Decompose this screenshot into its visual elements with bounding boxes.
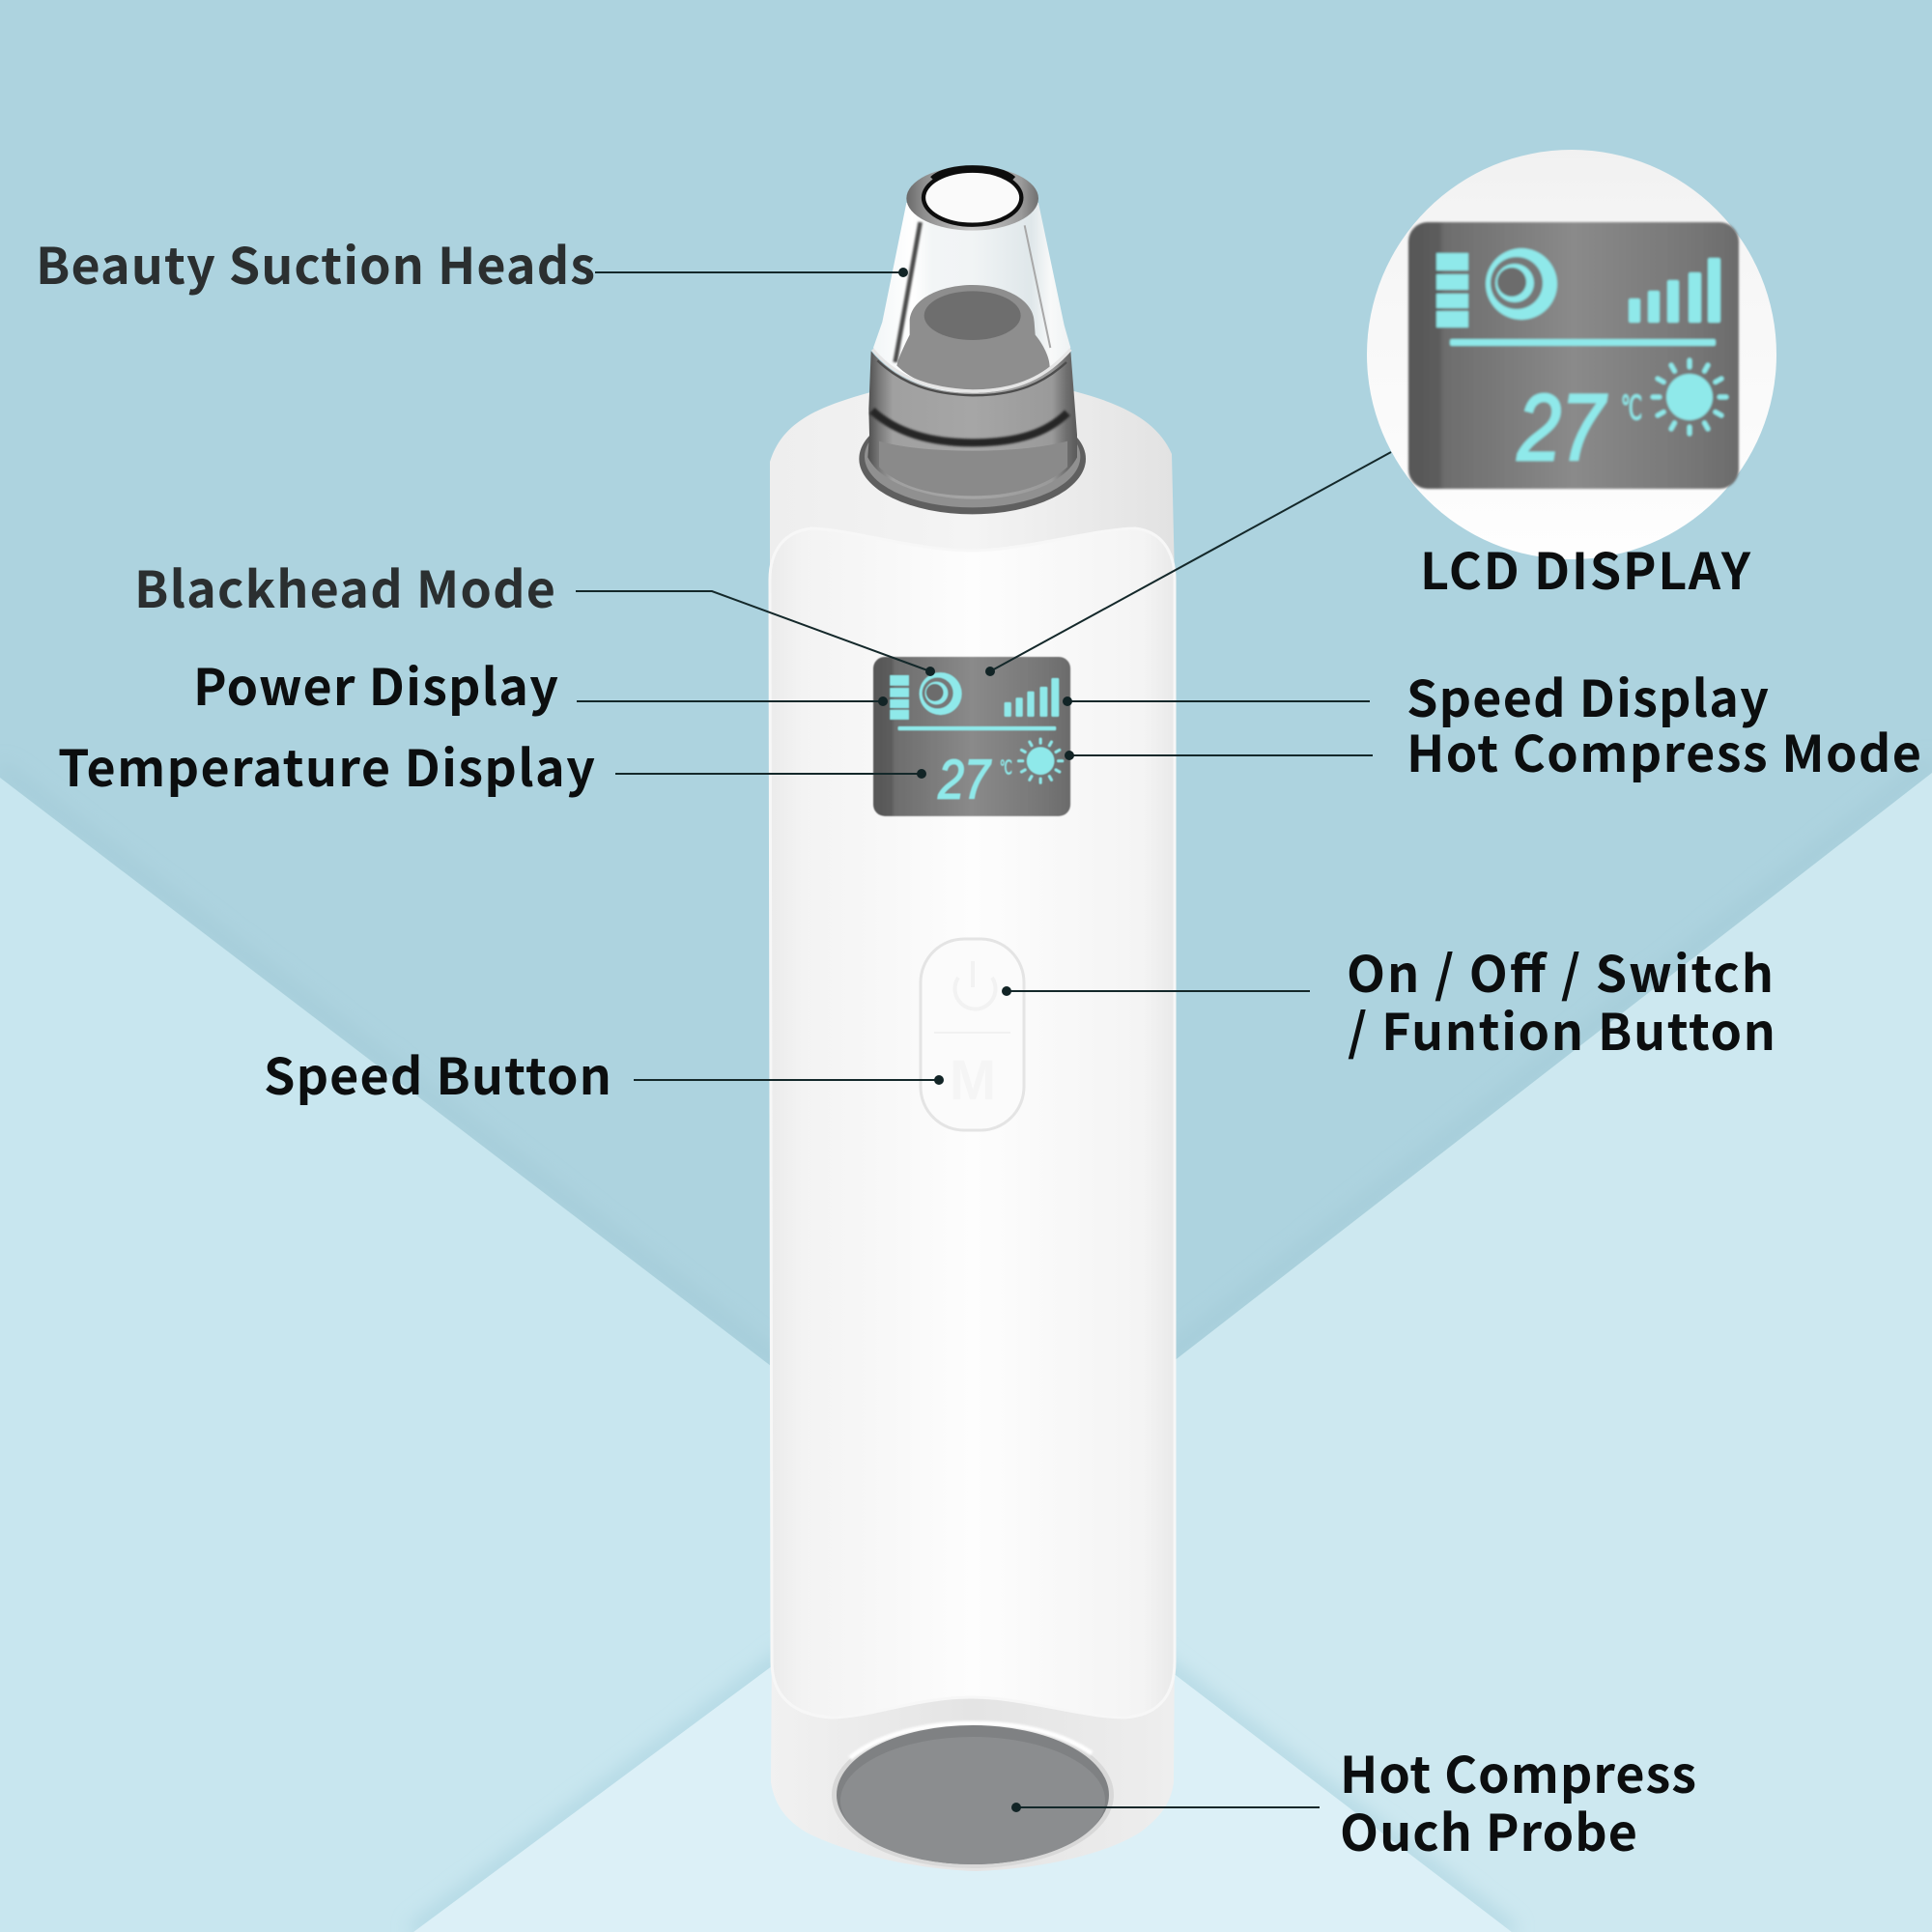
icon: power [954,961,995,1009]
signal bars [1629,258,1720,323]
callout: Beauty Suction Heads: Beauty Suction Heads [36,226,595,298]
heading: LCD DISPLAY: LCD DISPLAY [1420,531,1751,604]
sun icon [1019,739,1063,782]
callout: Hot Compress Mode [1065,714,1921,786]
glass cone [873,203,1070,393]
callout: Hot Compress Ouch Probe [1011,1735,1696,1865]
callout: On / Off / Switch / Funtion Button [1002,934,1776,1065]
collar ring arcs [872,350,1070,391]
power / function button [921,939,1024,1130]
callout: Speed Button: Speed Button [264,1037,611,1109]
callout: LCD zoom leader [985,452,1391,676]
callout: Beauty Suction Heads [36,226,908,298]
blackhead mode icon [920,672,962,715]
background: bottom wedge [413,1519,1512,1932]
head base flange [859,404,1086,514]
large LCD [1408,222,1739,489]
device: bottom probe [832,1721,1114,1868]
background: bottom wedge shadow [413,1519,1512,1932]
background: right wedge [971,773,1932,1932]
callout: Power Display [193,647,888,720]
callout: Speed Display: Speed Display [1406,659,1769,731]
callout: Blackhead Mode: Blackhead Mode [134,550,555,622]
device: base [771,1642,1175,1871]
divider [1450,339,1716,346]
callout: On / Off / Switch / Funtion Button: On / Off / Switch [1347,934,1774,1007]
sun icon [1653,360,1726,434]
silicone nozzle [896,285,1050,389]
temperature: 27 [937,749,991,810]
callout: Speed Display [1063,659,1769,731]
background: left wedge [0,778,971,1932]
large LCD: ℃ [1621,390,1642,427]
LCD on device: ℃ [1000,757,1012,779]
collar lower shade [879,441,1067,496]
device [770,166,1175,1871]
callout: Speed Button [264,1037,944,1109]
head rim [906,166,1038,231]
callout: On / Off / Switch / Funtion Button: / Funtion Button [1348,992,1776,1065]
callout: Blackhead Mode [134,550,935,676]
temperature: 27 [1517,375,1607,480]
cone dark lines [895,222,921,362]
signal bars [1005,678,1059,717]
collar dark band [872,411,1067,442]
callout: Hot Compress Ouch Probe: Ouch Probe [1340,1793,1637,1865]
callout: Temperature Display [58,728,926,801]
callout: Temperature Display: Temperature Display [58,728,595,801]
power bars [1436,253,1468,327]
magnified LCD callout [1367,150,1776,604]
device: top cap [770,391,1175,580]
button letter M: M [950,1049,996,1112]
magnifier circle [1367,150,1776,559]
callout: Power Display: Power Display [193,647,558,720]
device: main body [770,528,1175,1718]
LCD on device [873,657,1070,816]
callout: Hot Compress Mode: Hot Compress Mode [1406,714,1921,786]
blackhead mode icon [1486,248,1557,320]
collar [867,351,1077,499]
background: edge shadow [0,763,1932,1509]
callout: Hot Compress Ouch Probe: Hot Compress [1340,1735,1696,1807]
power bars [890,675,909,720]
device: suction head [859,166,1086,514]
divider [898,726,1056,730]
